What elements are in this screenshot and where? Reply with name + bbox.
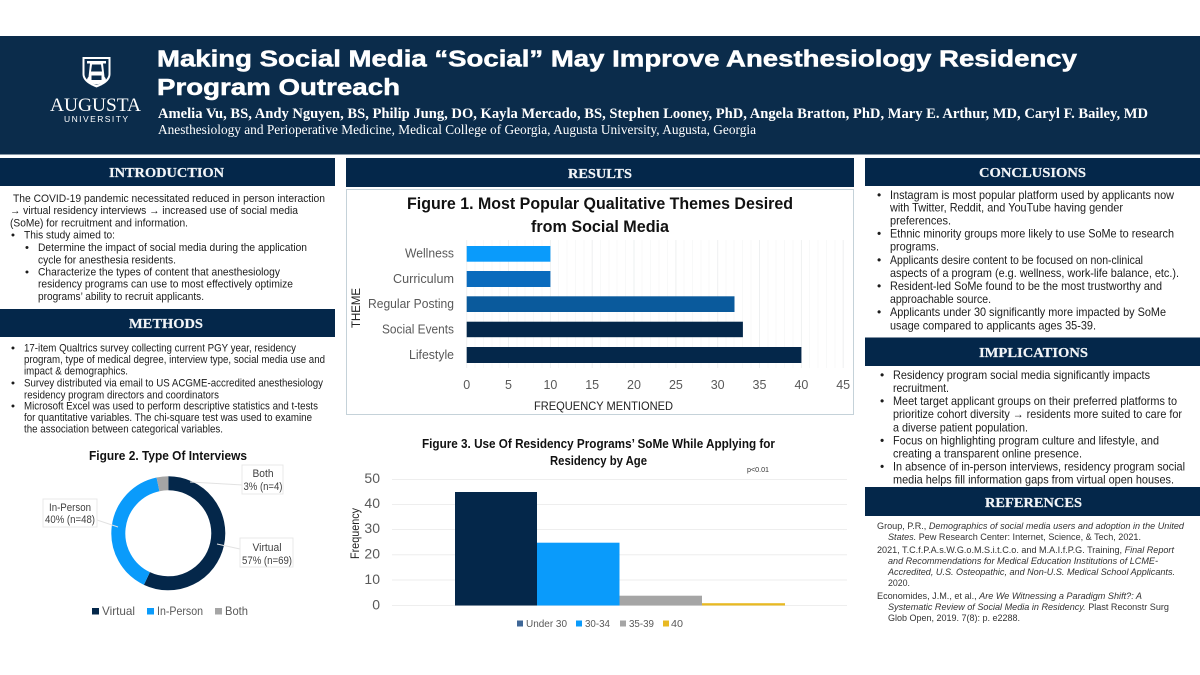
- affiliation: Anesthesiology and Perioperative Medicine, Medical College of Georgia, Augusta University, Augusta, Georgia: [158, 122, 756, 137]
- authors: Amelia Vu, BS, Andy Nguyen, BS, Philip Jung, DO, Kayla Mercado, BS, Stephen Looney, PhD, Angela Bratton, PhD, Mary E. Arthur, MD, Caryl F. Bailey, MD: [158, 106, 1148, 122]
- text block: conclusions: preferences.: [890, 213, 951, 227]
- legend: 30-34: [585, 619, 610, 630]
- y axis tick labels: 40: [364, 495, 380, 511]
- icon: Augusta University logo: AUGUSTA: [50, 95, 141, 116]
- x axis tick labels: 15: [585, 378, 599, 392]
- text block: implications: •: [880, 460, 884, 474]
- text block: conclusions: Instagram is most popular platform used by applicants now: [890, 188, 1174, 202]
- panel: conclusions: [865, 158, 1200, 333]
- category labels: [368, 247, 454, 362]
- legend: 35-39: [629, 619, 654, 630]
- text block: introduction: Characterize the types of content that anesthesiology: [38, 266, 280, 278]
- heading: implications: IMPLICATIONS: [979, 346, 1088, 361]
- text block: conclusions: approachable source.: [890, 292, 991, 306]
- text block: conclusions: Applicants under 30 significantly more impacted by SoMe: [890, 305, 1166, 319]
- panel: references: [865, 487, 1200, 623]
- text block: references: Group, P.R., Demographics of social media users and adoption in the United: [877, 520, 1185, 531]
- y axis tick labels: 20: [364, 546, 380, 562]
- x axis tick labels: [463, 378, 850, 392]
- chart: figure 2 donut: [43, 449, 293, 618]
- text block: methods: 17-item Qualtrics survey collecting current PGY year, residency: [24, 342, 296, 354]
- text block: implications: recruitment.: [893, 381, 949, 395]
- icon: Augusta University logo: UNIVERSITY: [64, 114, 128, 124]
- text block: implications: Focus on highlighting program culture and lifestyle, and: [893, 434, 1159, 448]
- y axis tick labels: 0: [372, 596, 380, 612]
- text block: introduction: programs’ ability to recruit applicants.: [38, 291, 204, 303]
- heading: conclusions: [865, 158, 1200, 186]
- y axis tick labels: 30: [364, 520, 380, 536]
- y axis tick labels: [364, 470, 380, 612]
- title: Program Outreach: [157, 74, 400, 100]
- figure 3 title: Residency by Age: [550, 454, 647, 468]
- text block: references: Systematic Review of Social Media in Residency. Plast Reconstr Surg: [888, 601, 1169, 612]
- x axis tick labels: 20: [627, 378, 641, 392]
- x axis tick labels: 10: [543, 378, 557, 392]
- text block: introduction: residency programs can use to most effectively optimize: [38, 279, 293, 291]
- text block: implications: Meet target applicant groups on their preferred platforms to: [893, 394, 1177, 408]
- bars: [455, 492, 785, 606]
- heading: results: [346, 158, 854, 187]
- legend: In-Person: [157, 604, 203, 618]
- figure 3 title: Figure 3. Use Of Residency Programs’ SoMe While Applying for: [422, 437, 775, 451]
- x axis title: FREQUENCY MENTIONED: [534, 399, 673, 413]
- x axis tick labels: 35: [753, 378, 766, 392]
- text block: introduction: Determine the impact of social media during the application: [38, 242, 307, 254]
- text block: methods: •: [11, 400, 15, 412]
- legend: [92, 604, 248, 618]
- text block: references: Economides, J.M., et al., Are We Witnessing a Paradigm Shift?: A: [877, 590, 1142, 601]
- text block: implications: •: [880, 368, 884, 382]
- y axis tick labels: 10: [364, 571, 380, 587]
- text block: implications: [880, 368, 1185, 487]
- text block: conclusions: Applicants desire content to be focused on non-clinical: [890, 253, 1143, 267]
- text block: conclusions: •: [877, 253, 881, 267]
- text block: methods: •: [11, 342, 15, 354]
- text block: conclusions: •: [877, 279, 881, 293]
- category labels: Wellness: [405, 247, 454, 261]
- text block: methods: Microsoft Excel was used to perform descriptive statistics and t-tests: [24, 400, 318, 412]
- x axis tick labels: 45: [836, 378, 850, 392]
- text block: methods: the association between categorical variables.: [24, 424, 223, 436]
- y axis title: THEME: [349, 288, 363, 328]
- panel: implications: [865, 338, 1200, 487]
- heading: references: [865, 487, 1200, 516]
- heading: conclusions: CONCLUSIONS: [979, 166, 1086, 181]
- title: Making Social Media “Social” May Improve Anesthesiology Residency: [157, 46, 1077, 72]
- data label: in-person: 40% (n=48): [45, 514, 95, 526]
- icon: Augusta University logo: [50, 57, 141, 124]
- text block: conclusions: •: [877, 305, 881, 319]
- text block: implications: •: [880, 434, 884, 448]
- text block: methods: [11, 342, 325, 436]
- data label: virtual: Virtual: [252, 542, 282, 554]
- figure 1 title: Figure 1. Most Popular Qualitative Themes Desired: [407, 195, 793, 213]
- data label: both: 3% (n=4): [244, 481, 282, 493]
- x axis tick labels: 5: [505, 378, 512, 392]
- x axis tick labels: 0: [463, 378, 470, 392]
- data label: virtual: [240, 538, 293, 567]
- title: [157, 46, 1077, 100]
- data label: both: Both: [252, 468, 274, 480]
- text block: methods: Survey distributed via email to US ACGME-accredited anesthesiology: [24, 377, 323, 389]
- figure 2 title: Figure 2. Type Of Interviews: [89, 449, 247, 463]
- header banner: [0, 36, 1200, 154]
- data label: virtual: 57% (n=69): [242, 555, 292, 567]
- panel: methods: [0, 309, 335, 436]
- text block: conclusions: [877, 188, 1179, 333]
- category labels: Social Events: [382, 323, 454, 337]
- leader lines: [97, 482, 243, 549]
- panel: results: [346, 158, 854, 630]
- text block: implications: creating a transparent online presence.: [893, 447, 1082, 461]
- text block: introduction: •: [11, 230, 15, 242]
- text block: conclusions: •: [877, 227, 881, 241]
- text block: references: 2020.: [888, 577, 910, 588]
- text block: introduction: The COVID-19 pandemic necessitated reduced in person interaction: [13, 193, 325, 205]
- heading: introduction: INTRODUCTION: [109, 166, 224, 181]
- category labels: Curriculum: [393, 272, 454, 286]
- data label: in-person: In-Person: [49, 502, 91, 514]
- text block: conclusions: usage compared to applicants ages 35-39.: [890, 319, 1096, 333]
- heading: methods: METHODS: [129, 317, 203, 332]
- donut ring: [118, 483, 218, 583]
- text block: introduction: [10, 193, 325, 303]
- text block: introduction: This study aimed to:: [24, 230, 115, 242]
- figure 1 title: [407, 195, 793, 236]
- text block: methods: residency program directors and coordinators: [24, 389, 219, 401]
- text block: introduction: •: [25, 242, 29, 254]
- text block: references: Accredited, U.S. Osteopathic, and Non-U.S. Medical School Applicants.: [887, 566, 1175, 577]
- legend: [517, 619, 683, 630]
- category labels: Regular Posting: [368, 297, 454, 311]
- legend: Under 30: [526, 619, 567, 630]
- text block: methods: program, type of medical degree, interview type, social media use and: [24, 354, 325, 366]
- chart: figure 3 bar chart: [350, 437, 847, 630]
- text block: conclusions: programs.: [890, 240, 939, 254]
- text block: implications: media helps fill information gaps from virtual open houses.: [893, 473, 1174, 487]
- text block: implications: Residency program social media significantly impacts: [893, 368, 1150, 382]
- text block: methods: impact & demographics.: [24, 366, 128, 378]
- text block: conclusions: aspects of a program (e.g. wellness, work-life balance, etc.).: [890, 266, 1179, 280]
- figure 1 title: from Social Media: [531, 218, 670, 236]
- y axis title: Frequency: [350, 508, 362, 559]
- text block: methods: •: [11, 377, 15, 389]
- heading: implications: [865, 338, 1200, 366]
- p value: p<0.01: [747, 467, 769, 474]
- legend: 40: [671, 619, 683, 630]
- text block: methods: for quantitative variables. The chi-square test was used to examine: [24, 412, 312, 424]
- x axis tick labels: 30: [711, 378, 725, 392]
- heading: methods: [0, 309, 335, 337]
- heading: results: RESULTS: [568, 167, 632, 182]
- text block: conclusions: Resident-led SoMe found to be the most trustworthy and: [890, 279, 1162, 293]
- bars: [467, 246, 801, 363]
- text block: introduction: (SoMe) for recruitment and information.: [10, 218, 188, 230]
- figure 3 title: [422, 437, 775, 468]
- text block: references: [877, 520, 1185, 623]
- text block: conclusions: with Twitter, Reddit, and YouTube having gender: [889, 201, 1123, 215]
- heading: introduction: [0, 158, 335, 186]
- text block: conclusions: Ethnic minority groups more likely to use SoMe to research: [890, 227, 1174, 241]
- category labels: Lifestyle: [409, 348, 454, 362]
- y axis tick labels: 50: [364, 470, 380, 486]
- text block: introduction: → virtual residency interviews → increased use of social media: [10, 205, 299, 217]
- chart: figure 1 bar chart: [346, 190, 854, 414]
- text block: references: States. Pew Research Center: Internet, Science, & Tech, 2021.: [888, 531, 1141, 542]
- legend: Both: [225, 604, 248, 618]
- text block: introduction: cycle for anesthesia residents.: [38, 254, 176, 266]
- text block: references: and Recommendations for Medical Education Institutions of LCME-: [888, 555, 1158, 566]
- text block: conclusions: •: [877, 188, 881, 202]
- x axis tick labels: 40: [794, 378, 808, 392]
- text block: implications: •: [880, 394, 884, 408]
- legend: Virtual: [102, 604, 135, 618]
- text block: references: Glob Open, 2019. 7(8): p. e2288.: [888, 612, 1020, 623]
- panel: introduction: [0, 158, 335, 303]
- data label: both: [242, 465, 283, 494]
- text block: references: 2021, T.C.f.P.A.s.W.G.o.M.S.i.t.C.o. and M.A.I.f.P.G. Training, Final Report: [877, 544, 1174, 555]
- text block: implications: a diverse patient population.: [893, 421, 1028, 435]
- x axis tick labels: 25: [669, 378, 683, 392]
- text block: introduction: •: [25, 266, 29, 278]
- heading: references: REFERENCES: [985, 496, 1082, 511]
- data label: in-person: [43, 499, 97, 527]
